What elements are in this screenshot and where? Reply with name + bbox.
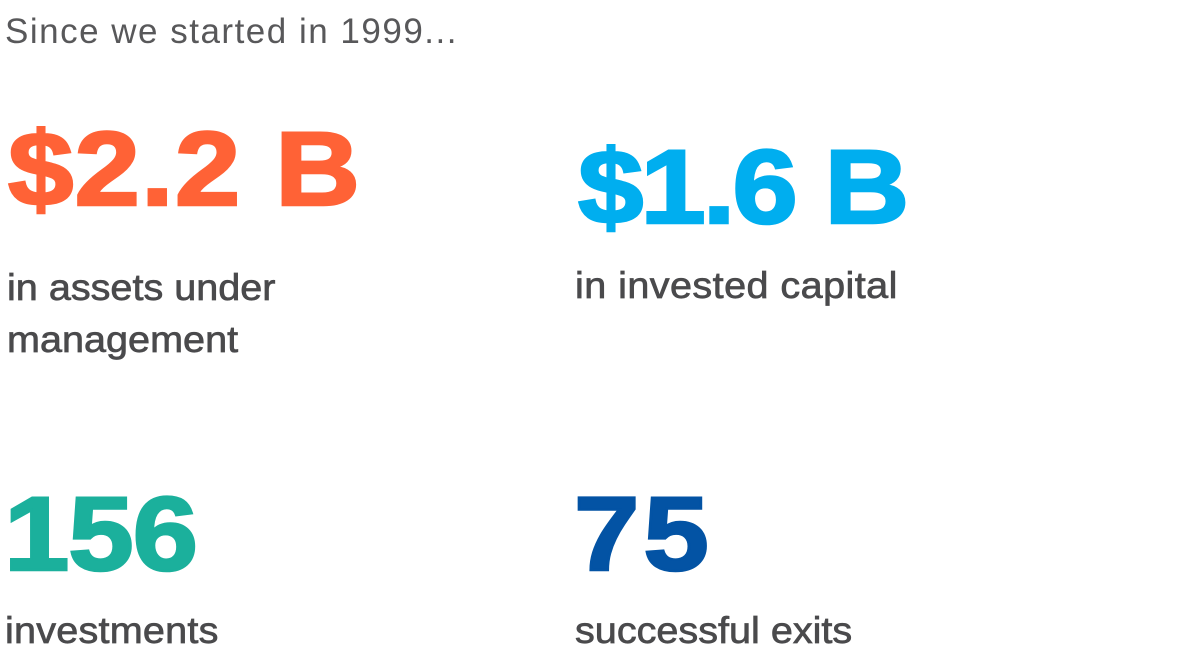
label: investments: investments	[5, 610, 219, 651]
value: $2.2 B: $2.2 B	[8, 111, 361, 228]
stat: assets under management	[7, 111, 361, 360]
value: 156: 156	[4, 476, 197, 593]
label: successful exits: successful exits	[575, 610, 852, 651]
label: in invested capital: in invested capital	[575, 265, 898, 306]
intro heading: Since we started in 1999...	[5, 12, 458, 51]
stat: investments	[4, 476, 219, 651]
value: $1.6 B: $1.6 B	[578, 129, 906, 246]
label: in assets under management: management	[7, 319, 238, 360]
stat: invested capital	[575, 129, 906, 306]
label: in assets under management	[7, 267, 276, 360]
stat: successful exits	[574, 476, 852, 651]
label: in assets under management: in assets under	[7, 267, 276, 308]
value: 75: 75	[574, 476, 713, 593]
